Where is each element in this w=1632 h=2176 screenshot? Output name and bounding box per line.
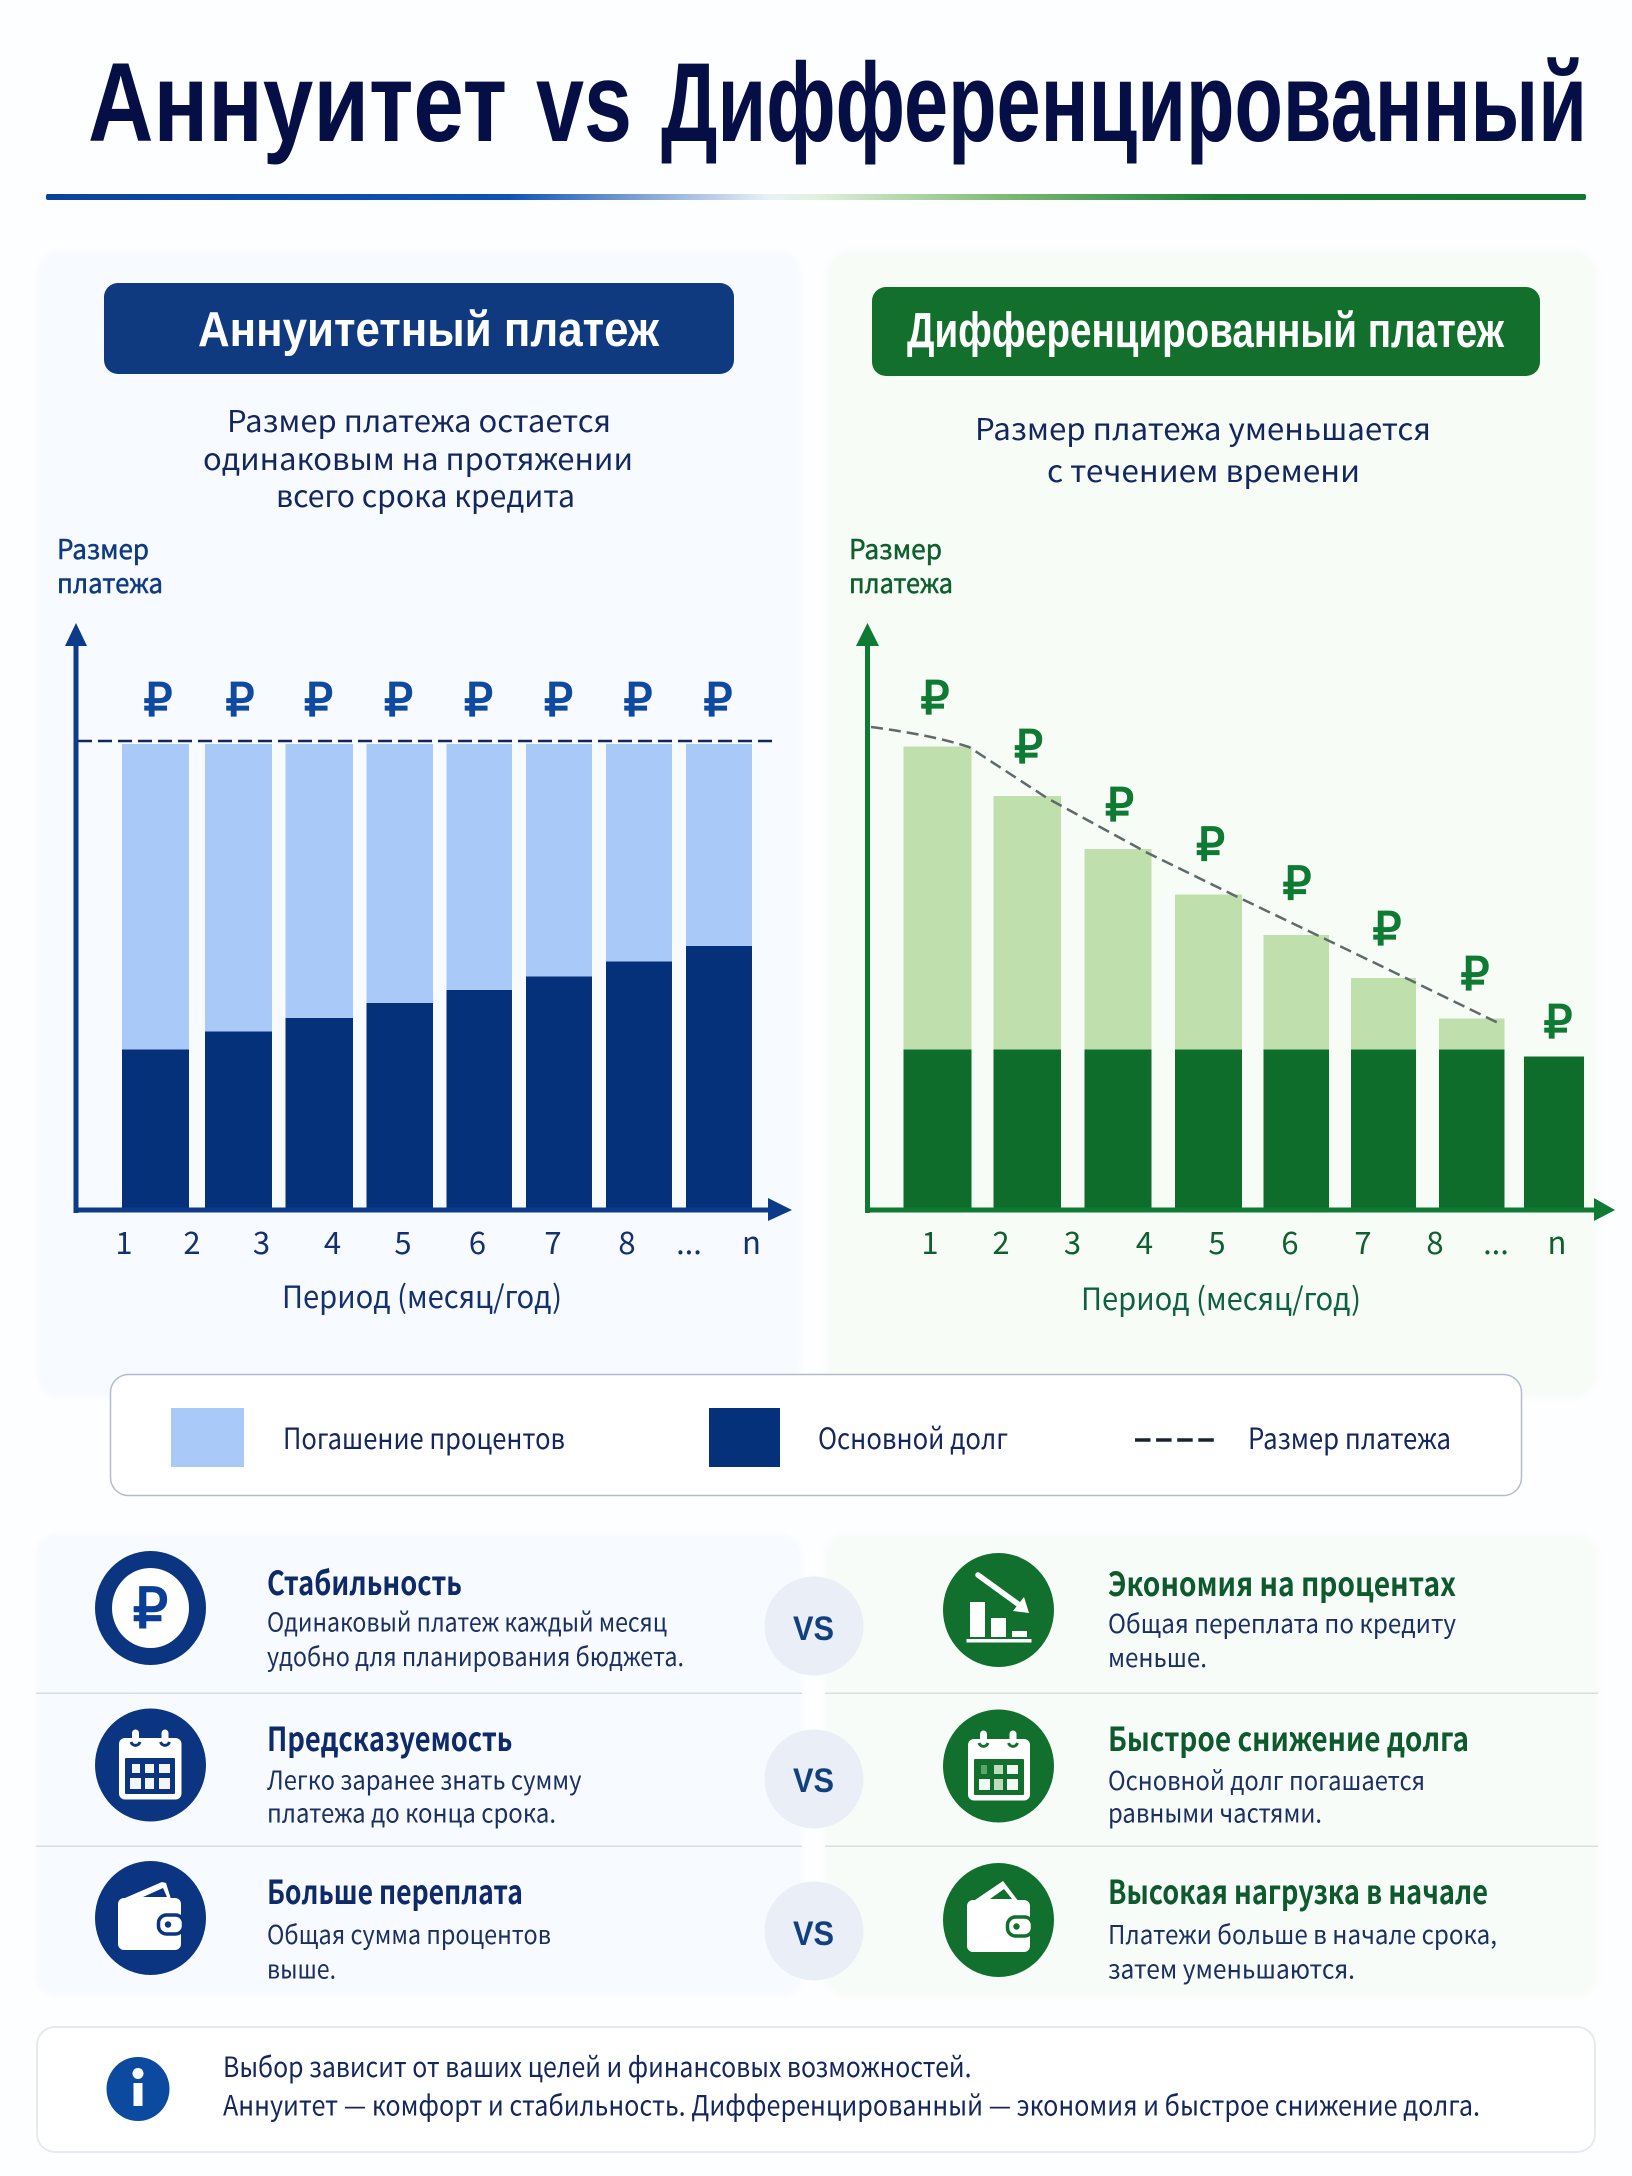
icon: info xyxy=(106,2057,170,2121)
feature: fast debt reduction: равными частями. xyxy=(1108,1794,1322,1830)
vs badge 1 xyxy=(764,1576,864,1676)
period labels: 1 xyxy=(115,1218,133,1263)
period labels: n xyxy=(742,1218,761,1263)
legend: dashed line sample xyxy=(1135,1438,1215,1442)
ruble symbols: ₽ xyxy=(384,674,413,726)
footer text: Аннуитет — комфорт и стабильность. Дифференцированный — экономия и быстрое снижение долга. xyxy=(223,2084,1480,2124)
ruble symbols: ₽ xyxy=(703,674,733,726)
period labels: 5 xyxy=(1208,1218,1226,1263)
ruble symbols: ₽ xyxy=(1282,858,1312,910)
feature: higher overpayment: Общая сумма процентов xyxy=(267,1915,551,1952)
ruble symbols: ₽ xyxy=(1460,948,1490,1000)
feature: fast debt reduction: Быстрое снижение долга xyxy=(1108,1713,1469,1761)
feature: interest savings: меньше. xyxy=(1108,1638,1207,1675)
period labels xyxy=(115,1218,761,1263)
principal bars xyxy=(122,946,752,1211)
feature: stability: Одинаковый платеж каждый месяц xyxy=(267,1602,667,1640)
feature: stability xyxy=(267,1557,684,1674)
legend: principal label: Основной долг xyxy=(818,1416,1008,1458)
feature: high initial load: Высокая нагрузка в начале xyxy=(1108,1866,1488,1914)
period labels: 2 xyxy=(183,1218,201,1263)
panel: differentiated features xyxy=(825,1534,1598,1996)
heading: annuity: Аннуитетный платеж xyxy=(198,303,660,357)
icon: wallet xyxy=(95,1861,206,1975)
legend: principal swatch xyxy=(709,1408,780,1467)
description: differentiated: с течением времени xyxy=(1047,447,1360,491)
ruble symbols: ₽ xyxy=(623,674,653,726)
description: annuity: Размер платежа остается xyxy=(227,397,611,441)
heading: annuity xyxy=(104,283,734,374)
period labels: 4 xyxy=(1136,1218,1153,1263)
footer note xyxy=(37,2027,1595,2152)
interest bars xyxy=(904,746,1504,1050)
ruble symbols xyxy=(143,674,733,726)
vs badge 1: VS xyxy=(793,1610,834,1648)
ruble symbols: ₽ xyxy=(1372,903,1402,955)
principal bars xyxy=(904,1050,1584,1211)
vs badge 2: VS xyxy=(793,1762,834,1800)
y axis label: annuity xyxy=(57,528,163,601)
period labels: ... xyxy=(1483,1218,1509,1263)
axes xyxy=(856,623,1615,1221)
description: annuity: одинаковым на протяжении xyxy=(203,435,633,479)
title: vs xyxy=(536,40,632,165)
feature: stability: удобно для планирования бюджета. xyxy=(267,1637,684,1674)
ruble symbols: ₽ xyxy=(1014,721,1043,773)
ruble symbols: ₽ xyxy=(304,674,333,726)
feature: high initial load: Платежи больше в начале срока, xyxy=(1108,1915,1497,1952)
y axis label: annuity: Размер xyxy=(57,528,149,567)
panel: annuity features xyxy=(36,1534,802,1996)
payment level dashed line xyxy=(78,740,775,742)
y axis label: annuity: платежа xyxy=(57,562,163,601)
legend: payment size label: Размер платежа xyxy=(1248,1416,1451,1458)
ruble symbols: ₽ xyxy=(1105,779,1134,831)
legend: interest label: Погашение процентов xyxy=(283,1416,565,1458)
description: differentiated: Размер платежа уменьшается xyxy=(975,405,1431,449)
feature: higher overpayment: Больше переплата xyxy=(267,1866,523,1914)
period labels: 3 xyxy=(253,1218,270,1263)
period labels xyxy=(921,1218,1566,1263)
title divider xyxy=(46,194,1586,200)
ruble symbols: ₽ xyxy=(225,674,255,726)
period labels: ... xyxy=(676,1218,702,1263)
feature: high initial load: затем уменьшаются. xyxy=(1108,1950,1355,1986)
chart: differentiated stacked bars xyxy=(856,623,1615,1319)
ruble symbols: ₽ xyxy=(143,674,173,726)
ruble symbols: ₽ xyxy=(1196,818,1225,870)
title: Аннуитет xyxy=(88,40,507,165)
title xyxy=(88,40,1587,165)
feature: higher overpayment xyxy=(267,1866,551,1986)
vs badge 3: VS xyxy=(793,1915,834,1953)
feature: predictability: Предсказуемость xyxy=(267,1713,512,1761)
feature: fast debt reduction: Основной долг погашается xyxy=(1108,1761,1425,1798)
ruble symbols: ₽ xyxy=(1543,996,1573,1048)
description: annuity xyxy=(203,397,633,516)
period labels: 7 xyxy=(1354,1218,1372,1263)
period labels: 7 xyxy=(544,1218,562,1263)
panel: differentiated payment xyxy=(827,250,1615,1398)
feature: stability: Стабильность xyxy=(267,1557,462,1605)
footer text xyxy=(223,2046,1480,2124)
heading: differentiated xyxy=(872,287,1540,376)
feature: interest savings xyxy=(1108,1558,1456,1675)
period labels: 4 xyxy=(324,1218,341,1263)
period labels: 3 xyxy=(1064,1218,1081,1263)
description: annuity: всего срока кредита xyxy=(276,472,575,516)
chart: annuity stacked bars xyxy=(65,623,792,1317)
y axis label: differentiated xyxy=(849,528,953,601)
icon: ruble coin xyxy=(95,1551,206,1665)
period labels: n xyxy=(1548,1218,1566,1263)
icon: green wallet xyxy=(943,1863,1054,1977)
axes xyxy=(65,623,792,1221)
period labels: 8 xyxy=(1426,1218,1444,1263)
interest bars xyxy=(122,744,752,1050)
vs badge 2 xyxy=(764,1730,864,1828)
icon: calendar xyxy=(95,1708,206,1822)
ruble symbols: ₽ xyxy=(920,672,950,724)
y axis label: differentiated: Размер xyxy=(849,528,942,567)
period labels: 5 xyxy=(394,1218,412,1263)
feature: interest savings: Экономия на процентах xyxy=(1108,1558,1456,1606)
period labels: 6 xyxy=(469,1218,486,1263)
ruble symbols: ₽ xyxy=(544,674,573,726)
period labels: 1 xyxy=(921,1218,939,1263)
icon: falling chart xyxy=(943,1553,1054,1667)
x axis label: Период (месяц/год) xyxy=(282,1272,562,1317)
feature: interest savings: Общая переплата по кредиту xyxy=(1108,1604,1456,1641)
feature: predictability: платежа до конца срока. xyxy=(267,1794,556,1830)
icon: green calendar xyxy=(943,1710,1054,1822)
period labels: 8 xyxy=(618,1218,636,1263)
legend: interest swatch xyxy=(171,1408,244,1467)
x axis label: Период (месяц/год) xyxy=(1081,1274,1361,1319)
feature: predictability: Легко заранее знать сумму xyxy=(267,1760,582,1798)
footer text: Выбор зависит от ваших целей и финансовых возможностей. xyxy=(223,2046,972,2086)
period labels: 6 xyxy=(1281,1218,1299,1263)
period labels: 2 xyxy=(992,1218,1010,1263)
payment size dashed curve xyxy=(871,727,1502,1025)
feature: high initial load xyxy=(1108,1866,1497,1986)
ruble symbols: ₽ xyxy=(464,674,493,726)
panel: annuity payment xyxy=(37,250,801,1398)
y axis label: differentiated: платежа xyxy=(849,562,953,601)
vs badge 3 xyxy=(764,1882,864,1980)
description: differentiated xyxy=(975,405,1431,491)
icon: ruble coin: ₽ xyxy=(133,1577,168,1640)
legend xyxy=(110,1374,1522,1496)
feature: higher overpayment: выше. xyxy=(267,1950,336,1986)
feature: fast debt reduction xyxy=(1108,1713,1469,1830)
ruble symbols xyxy=(920,672,1573,1048)
feature: predictability xyxy=(267,1713,582,1830)
